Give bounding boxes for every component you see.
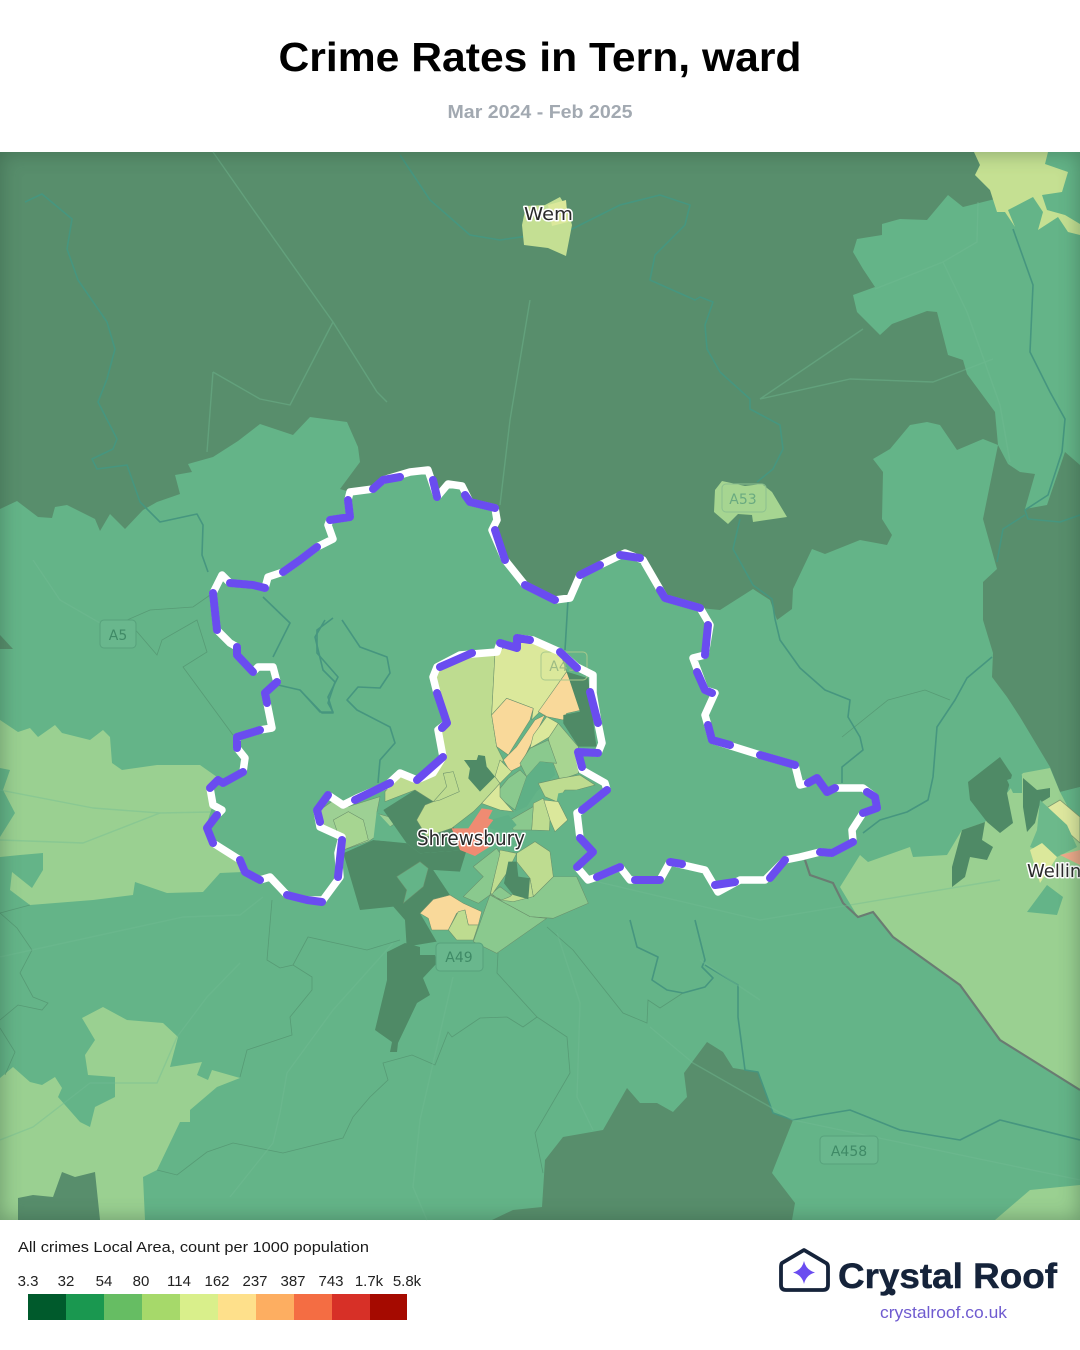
label Wellington: Wellin bbox=[1027, 861, 1080, 882]
road badge A458: A458 bbox=[831, 1144, 867, 1160]
peach north-east bbox=[538, 672, 582, 720]
dark south-west mass bbox=[343, 840, 467, 947]
road badge A49 north: A49 bbox=[549, 659, 577, 675]
rivers bbox=[25, 155, 1080, 1140]
west pale fingers bbox=[320, 797, 400, 850]
south light wedge bbox=[490, 877, 588, 918]
thin boundaries bbox=[0, 593, 950, 1175]
legend scale labels: 32 bbox=[58, 1273, 74, 1290]
dark south-west patch bbox=[18, 1172, 100, 1220]
logo wordmark: Crystal Roof bbox=[838, 1257, 1057, 1296]
road badge A49 bbox=[436, 943, 483, 971]
main north-west light bbox=[385, 653, 503, 837]
ward boundary purple dashes bbox=[207, 477, 877, 902]
legend colour bar bbox=[28, 1294, 407, 1320]
ward boundary white outline bbox=[207, 470, 877, 900]
label Wem: Wem bbox=[524, 204, 573, 225]
legend scale labels: 387 bbox=[280, 1273, 306, 1290]
road badge A458 bbox=[820, 1136, 878, 1164]
ward boundary bbox=[207, 470, 877, 902]
wellington area bbox=[952, 757, 1080, 915]
pale centre strips bbox=[530, 717, 558, 748]
legend title: All crimes Local Area, count per 1000 population bbox=[18, 1239, 369, 1256]
light west area bbox=[0, 720, 243, 905]
shrewsbury districts bbox=[320, 640, 597, 953]
legend scale labels: 162 bbox=[204, 1273, 230, 1290]
road badges bbox=[100, 484, 878, 1164]
place labels bbox=[417, 204, 1080, 882]
dark strip south of Shrewsbury bbox=[375, 943, 437, 1052]
peach south-west bbox=[420, 895, 482, 930]
legend scale labels: 3.3 bbox=[18, 1273, 38, 1290]
road badge A53 bbox=[722, 484, 766, 512]
central dark blob bbox=[464, 755, 495, 792]
central pale pieces bbox=[482, 783, 513, 812]
legend scale labels: 5.8k bbox=[393, 1273, 422, 1290]
road badge A49 north bbox=[541, 652, 587, 680]
town at A53 bbox=[714, 481, 787, 524]
south centre bbox=[530, 832, 577, 877]
legend scale labels: 1.7k bbox=[355, 1273, 384, 1290]
legend scale labels: 114 bbox=[167, 1273, 191, 1290]
road badge A49: A49 bbox=[445, 950, 473, 966]
dark west triangle bbox=[0, 635, 13, 649]
website url: crystalroof.co.uk bbox=[880, 1303, 1008, 1322]
label Shrewsbury: Shrewsbury bbox=[417, 826, 525, 850]
base map area bbox=[0, 152, 1080, 1220]
salmon city centre bbox=[452, 808, 493, 856]
roads bbox=[0, 152, 1080, 1220]
dark east strip bbox=[563, 672, 597, 747]
dark north region bbox=[0, 152, 998, 620]
legend scale labels: 743 bbox=[318, 1273, 344, 1290]
light south-east corner bbox=[995, 1185, 1080, 1220]
road badge A53: A53 bbox=[729, 492, 757, 508]
wem town bbox=[522, 197, 572, 256]
light east area bbox=[840, 768, 1080, 1090]
light top right area bbox=[974, 152, 1080, 235]
legend scale labels: 54 bbox=[96, 1273, 112, 1290]
legend scale labels: 80 bbox=[133, 1273, 149, 1290]
road badge A5 bbox=[100, 620, 136, 648]
logo icon: house with star bbox=[781, 1250, 828, 1290]
light south-west area bbox=[0, 1007, 240, 1220]
county boundary bbox=[805, 860, 1080, 1090]
legend scale labels bbox=[18, 1273, 422, 1290]
date subtitle: Mar 2024 - Feb 2025 bbox=[448, 102, 632, 122]
east light greens bbox=[548, 723, 578, 780]
dark south patch bbox=[492, 1042, 795, 1220]
legend scale labels: 237 bbox=[242, 1273, 268, 1290]
road badge A5: A5 bbox=[109, 628, 127, 644]
title: Crime Rates in Tern, ward bbox=[278, 34, 802, 80]
dark east region bbox=[983, 445, 1080, 792]
pale north bbox=[492, 640, 567, 720]
